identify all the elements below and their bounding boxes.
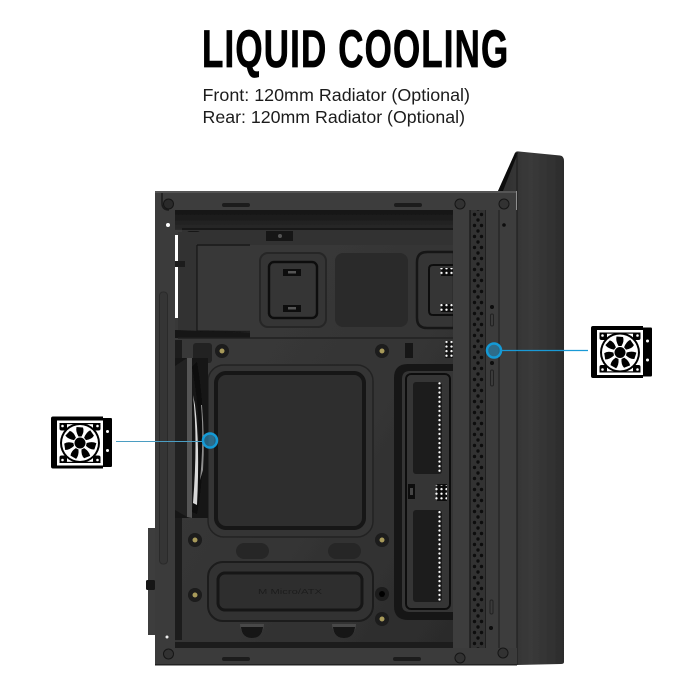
motherboard lower cutout: [208, 562, 373, 621]
side tab: [173, 261, 185, 267]
PC case illustration: [146, 151, 564, 665]
mount notches: [240, 624, 356, 638]
icon: front radiator fan: [591, 326, 652, 378]
right side cutouts: [394, 364, 454, 620]
icon: rear radiator fan: [51, 416, 112, 468]
top chassis rail: [155, 191, 516, 210]
drive cage: [175, 232, 250, 338]
rear fan: [175, 358, 208, 518]
upper interior shelf: [175, 210, 455, 245]
standoffs: [188, 341, 454, 626]
subtitle: radiator support: Rear: 120mm Radiator (Optional): [202, 107, 465, 127]
cutout 2: [335, 253, 408, 327]
subtitle: radiator support: Front: 120mm Radiator (Optional): [202, 85, 470, 105]
title: LIQUID COOLING: [202, 19, 508, 79]
callout: front radiator marker: [487, 344, 588, 358]
vent slot lower: [413, 510, 442, 602]
front panel: [498, 151, 564, 665]
subtitle: radiator support: [202, 85, 470, 127]
bottom chassis rail: [155, 642, 517, 666]
vent slot upper: [413, 382, 442, 474]
backplate cutouts: [260, 252, 454, 328]
left chassis rail: [155, 191, 182, 665]
motherboard large cutout: [208, 365, 373, 537]
board marking: M Micro/ATX: [258, 589, 323, 596]
cutout 3: [417, 252, 454, 328]
cutout 1: [260, 253, 326, 327]
white side gap: [174, 235, 178, 318]
chassis interior plate: [175, 210, 455, 655]
oval cutouts: [236, 543, 361, 559]
front chassis column: [453, 210, 517, 655]
rear bracket: [146, 528, 157, 635]
callout: rear radiator marker: [116, 434, 217, 448]
